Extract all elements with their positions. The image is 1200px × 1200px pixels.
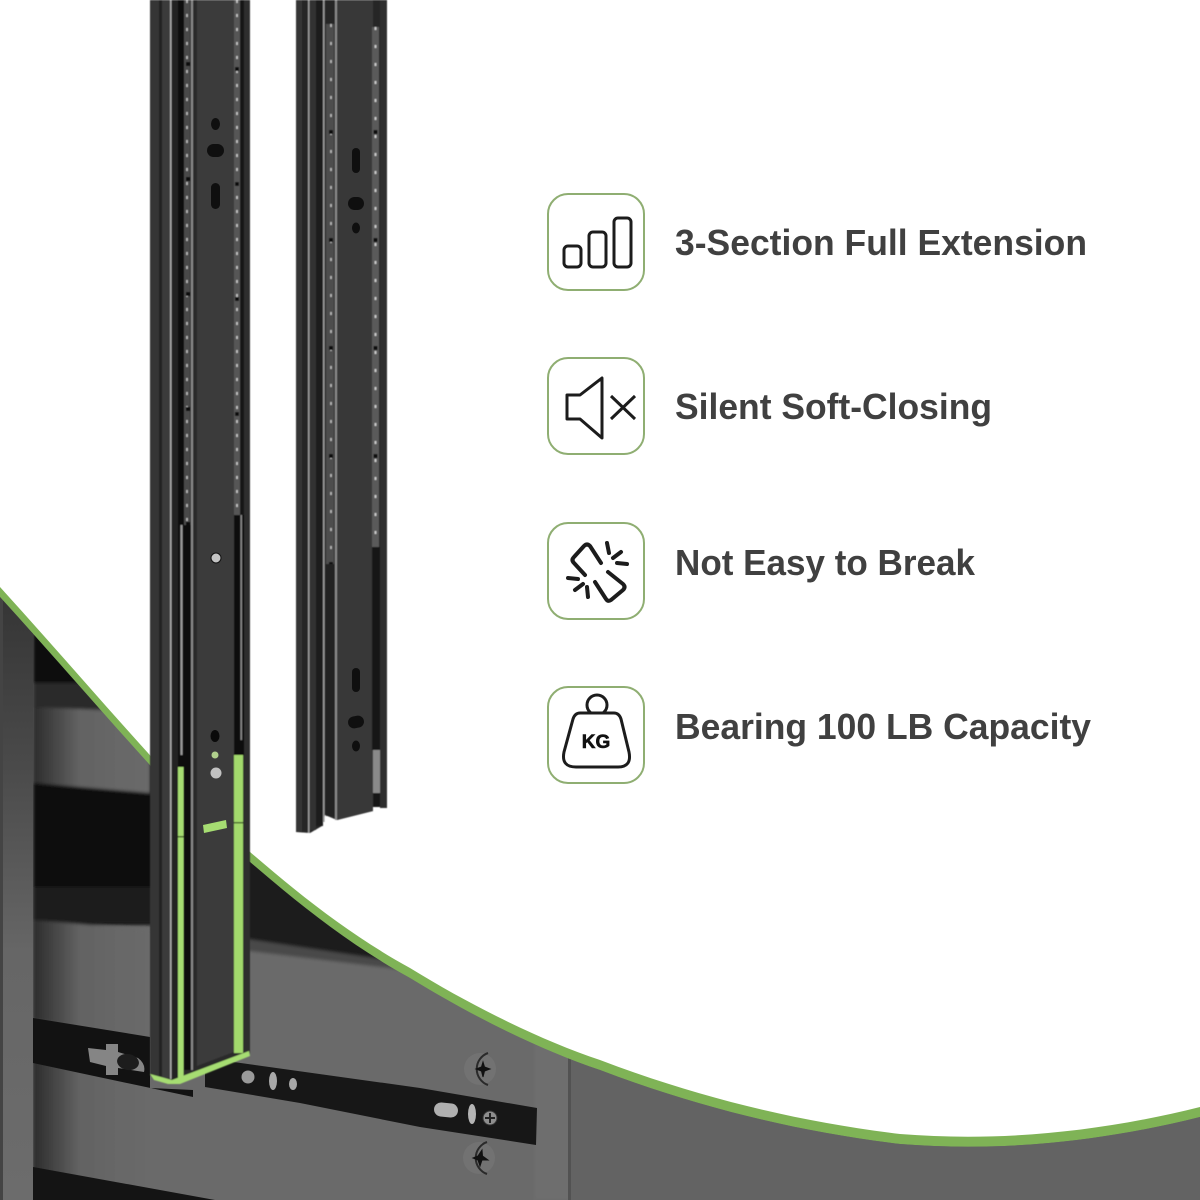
- icon: muted speaker: [548, 358, 644, 454]
- lower left rail and latch: [33, 1018, 193, 1097]
- icon: signal bars: [548, 194, 644, 290]
- feature: 3-section full extension: [548, 194, 1087, 290]
- green curved band: [0, 587, 1200, 1200]
- left rail mounting holes: [207, 118, 224, 778]
- screw upper: [464, 1053, 496, 1085]
- feature: bearing 100 lb capacity: [548, 687, 1091, 783]
- label: 3-Section Full Extension: 3-Section Full Extension: [675, 222, 1087, 263]
- screw lower: [463, 1142, 495, 1174]
- label: Bearing 100 LB Capacity: Bearing 100 LB Capacity: [675, 706, 1091, 747]
- feature: silent soft-closing: [548, 358, 992, 454]
- label: Silent Soft-Closing: Silent Soft-Closing: [675, 386, 992, 427]
- right rail mounting holes: [347, 148, 365, 752]
- icon: kg weight: [548, 687, 644, 783]
- slide rail left (extended, green ends): [150, 0, 250, 1084]
- slide rail right: [296, 0, 387, 833]
- grey cabinet photo background: [0, 580, 1200, 1200]
- mounted rail with holes and screws: [205, 1058, 537, 1145]
- green tab: [203, 820, 227, 833]
- icon: kg weight: KG: [582, 732, 610, 753]
- label: Not Easy to Break: Not Easy to Break: [675, 542, 976, 583]
- feature: not easy to break: [548, 523, 976, 619]
- icon: broken chain link: [548, 523, 644, 619]
